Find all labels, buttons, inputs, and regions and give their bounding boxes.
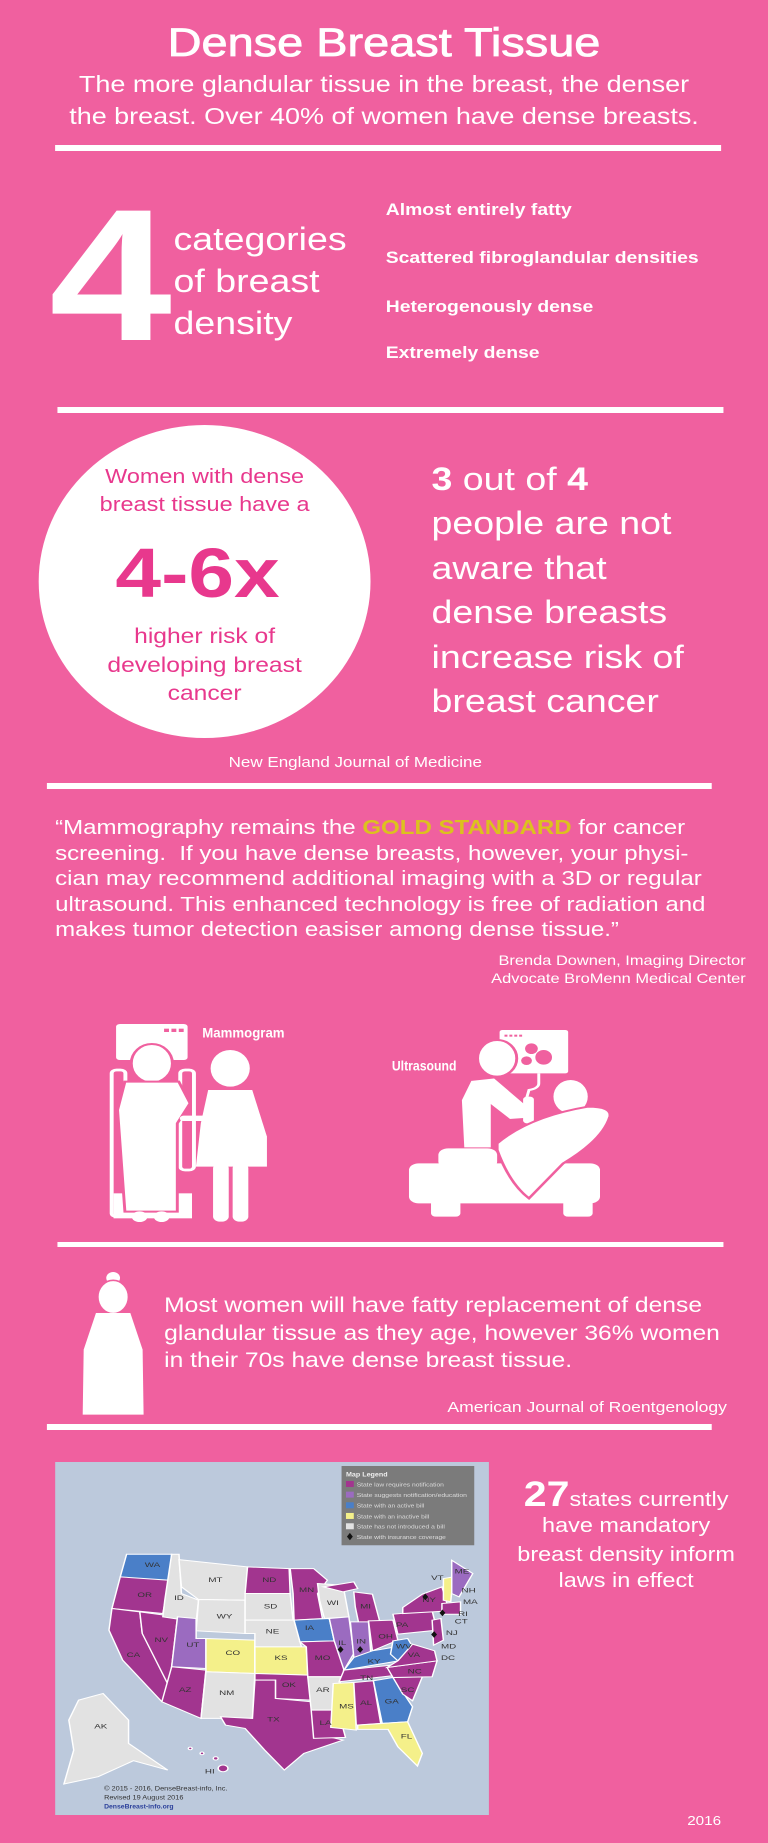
map: US breast density laws: ND xyxy=(262,1576,276,1583)
category list: Scattered fibroglandular densities xyxy=(386,249,699,267)
map: US breast density laws: IA xyxy=(305,1624,315,1632)
source: NEJM: New England Journal of Medicine xyxy=(229,755,482,771)
map legend: State with an inactive bill xyxy=(357,1514,430,1520)
map: US breast density laws: AL xyxy=(360,1699,373,1707)
map: US breast density laws: IL xyxy=(338,1639,347,1647)
map: US breast density laws: SD xyxy=(264,1602,277,1610)
map: US breast density laws: HI xyxy=(205,1767,215,1775)
awareness statement: increase risk of xyxy=(431,639,684,675)
map: US breast density laws: KY xyxy=(368,1657,381,1665)
map credit xyxy=(104,1785,227,1810)
category list: Heterogenously dense xyxy=(386,298,593,316)
circle outro text: developing breast xyxy=(107,654,302,676)
map: US breast density laws: AR xyxy=(316,1685,330,1693)
title: Dense Breast Tissue xyxy=(168,21,600,65)
quote attribution: Advocate BroMenn Medical Center xyxy=(491,970,746,986)
categories label xyxy=(174,221,347,341)
map: US breast density laws: WI xyxy=(327,1599,339,1607)
map: US breast density laws: TX xyxy=(267,1715,280,1723)
icon: mammogram xyxy=(112,1024,267,1222)
map: US breast density laws: IN xyxy=(356,1637,366,1645)
map: US breast density laws: NE xyxy=(266,1627,280,1635)
big number 4: 4 xyxy=(49,170,172,380)
quote attribution: Brenda Downen, Imaging Director xyxy=(498,952,746,968)
icons: mammogram and ultrasound xyxy=(110,1024,610,1222)
quote: ultrasound. This enhanced technology is free of radiation and xyxy=(55,892,705,916)
map legend xyxy=(342,1466,474,1545)
circle outro text: higher risk of xyxy=(134,625,275,648)
quote: “Mammography remains the GOLD STANDARD for cancer xyxy=(55,816,685,839)
stat 4-6x: 4-6x xyxy=(115,534,280,612)
subtitle: The more glandular tissue in the breast, the denser xyxy=(79,71,689,97)
category list xyxy=(386,201,699,362)
map: US breast density laws: AZ xyxy=(179,1685,191,1693)
circle outro text xyxy=(107,625,302,705)
source: AJR: American Journal of Roentgenology xyxy=(447,1399,727,1416)
map legend: Map Legend xyxy=(346,1470,388,1478)
categories label: density xyxy=(174,305,292,341)
aging text xyxy=(164,1294,720,1372)
map legend: State with insurance coverage xyxy=(357,1535,446,1541)
map: US breast density laws: MI xyxy=(360,1602,371,1610)
subtitle xyxy=(69,71,699,129)
map credit: Revised 19 August 2016 xyxy=(104,1794,184,1801)
map: US breast density laws: WV xyxy=(396,1642,412,1650)
map: US breast density laws: PA xyxy=(396,1620,409,1628)
map: US breast density laws: TN xyxy=(360,1674,373,1682)
map: US breast density laws: OH xyxy=(378,1632,393,1640)
panel: 4 categories xyxy=(49,170,699,380)
map: US breast density laws: NH xyxy=(462,1586,476,1594)
map: US breast density laws: VT xyxy=(431,1574,444,1582)
map: US breast density laws: UT xyxy=(186,1640,199,1648)
map: US breast density laws: ID xyxy=(174,1594,184,1602)
map legend: State with an active bill xyxy=(357,1504,425,1509)
stat: 27 states: 27states currently xyxy=(524,1475,728,1514)
map: US breast density laws: NJ xyxy=(446,1629,458,1637)
map: US breast density laws: CO xyxy=(226,1649,241,1657)
aging text: in their 70s have dense breast tissue. xyxy=(164,1349,572,1372)
circle outro text: cancer xyxy=(168,682,242,705)
map: US breast density laws: NY xyxy=(422,1596,436,1603)
map: US breast density laws: NV xyxy=(155,1635,169,1643)
icon: ultrasound xyxy=(409,1030,610,1217)
map legend: State has not introduced a bill xyxy=(357,1525,445,1530)
map: US breast density laws: OK xyxy=(282,1680,296,1688)
quote xyxy=(55,816,705,941)
map: US breast density laws xyxy=(55,1462,489,1815)
map: US breast density laws: KS xyxy=(274,1654,288,1662)
map: US breast density laws: CT xyxy=(455,1617,468,1625)
map: US breast density laws: ME xyxy=(455,1567,470,1575)
circle: 4-6x risk xyxy=(39,425,371,738)
map: US breast density laws: NC xyxy=(408,1667,422,1675)
map: US breast density laws: MN xyxy=(299,1586,314,1593)
map: US breast density laws: GA xyxy=(385,1697,399,1705)
awareness statement: people are not xyxy=(431,505,671,541)
map: US breast density laws: MS xyxy=(339,1702,354,1710)
categories label: categories xyxy=(174,221,347,257)
quote: cian may recommend additional imaging with a 3D or regular xyxy=(55,867,702,890)
map: US breast density laws: MO xyxy=(315,1654,331,1662)
subtitle: the breast. Over 40% of women have dense breasts. xyxy=(69,103,699,129)
map: US breast density laws: WY xyxy=(217,1612,233,1620)
stat: 27 states: breast density inform xyxy=(517,1544,735,1566)
map: US breast density laws: MA xyxy=(463,1598,478,1606)
circle intro text: Women with dense xyxy=(105,466,304,488)
label: Mammogram: Mammogram xyxy=(202,1025,285,1041)
map: US breast density laws: WA xyxy=(145,1561,161,1568)
label: Ultrasound: Ultrasound xyxy=(392,1058,456,1074)
awareness statement xyxy=(431,461,684,719)
map: US breast density laws: CA xyxy=(127,1650,141,1658)
map legend: State law requires notification xyxy=(357,1482,444,1488)
stat: 27 states xyxy=(517,1475,735,1592)
category list: Almost entirely fatty xyxy=(386,201,572,219)
aging text: glandular tissue as they age, however 36% women xyxy=(164,1322,720,1344)
map credit: © 2015 - 2016, DenseBreast-info, Inc. xyxy=(104,1785,227,1792)
year: 2016 xyxy=(687,1813,721,1828)
awareness statement: dense breasts xyxy=(431,594,667,630)
categories label: of breast xyxy=(174,263,320,299)
map: US breast density laws: AK xyxy=(94,1722,108,1730)
map credit: DenseBreast-info.org xyxy=(104,1803,174,1810)
category list: Extremely dense xyxy=(386,344,540,362)
circle intro text: breast tissue have a xyxy=(100,494,310,516)
circle intro text xyxy=(100,466,310,516)
stat: 27 states: laws in effect xyxy=(559,1570,694,1592)
stat: 27 states: have mandatory xyxy=(542,1515,710,1537)
quote: makes tumor detection easiser among dense tissue.” xyxy=(55,918,619,941)
map: US breast density laws: VA xyxy=(408,1650,420,1658)
map legend: State suggests notification/education xyxy=(357,1493,467,1499)
map: US breast density laws: NM xyxy=(219,1689,234,1697)
map: US breast density laws: DC xyxy=(441,1654,455,1662)
map: US breast density laws: MD xyxy=(441,1642,456,1650)
awareness statement: aware that xyxy=(431,550,607,586)
map: US breast density laws: SC xyxy=(401,1685,414,1693)
awareness statement: 3 out of 4 xyxy=(431,461,588,497)
map: US breast density laws: OR xyxy=(137,1591,152,1598)
map: US breast density laws: FL xyxy=(401,1732,413,1740)
quote attribution xyxy=(491,952,746,986)
aging text: Most women will have fatty replacement of dense xyxy=(164,1294,702,1317)
map: US breast density laws: MT xyxy=(208,1576,222,1583)
quote: screening. If you have dense breasts, however, your physi- xyxy=(55,842,688,864)
icon: elderly woman xyxy=(82,1272,144,1415)
map: US breast density laws: RI xyxy=(458,1610,468,1618)
awareness statement: breast cancer xyxy=(431,683,659,719)
map: US breast density laws: LA xyxy=(320,1719,332,1727)
